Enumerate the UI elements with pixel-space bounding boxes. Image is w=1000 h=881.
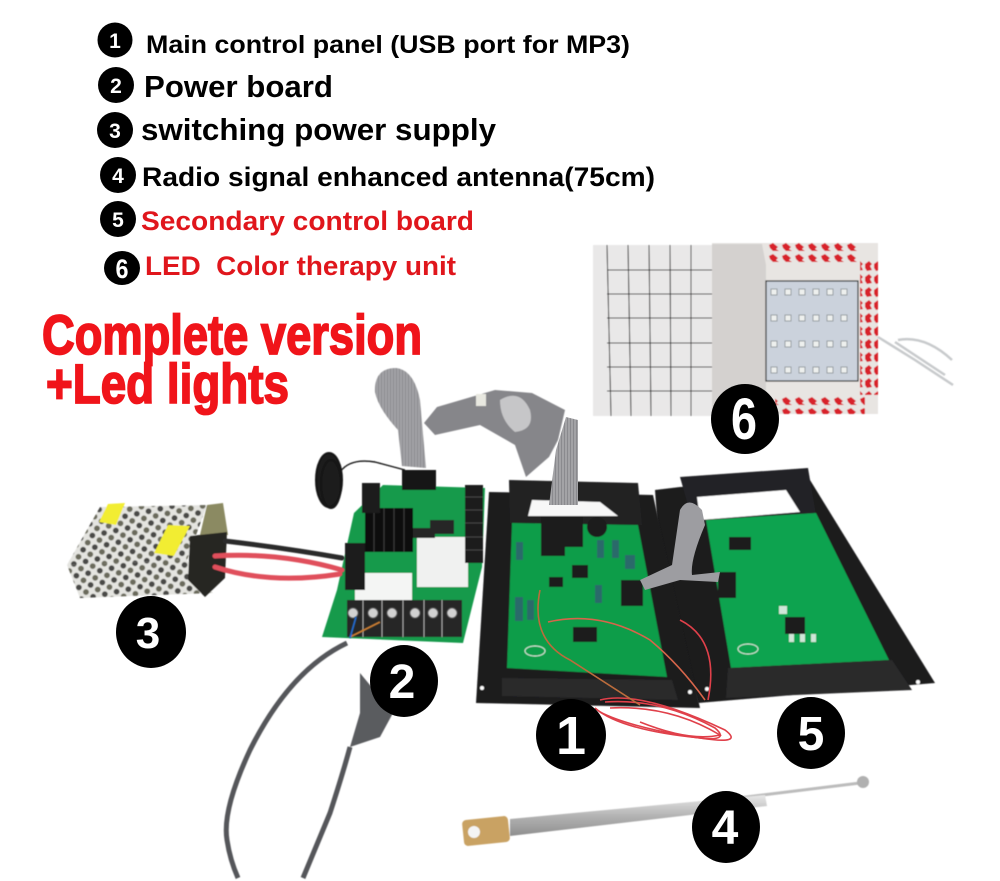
legend item 1 xyxy=(98,22,630,59)
rear wall xyxy=(509,480,642,525)
adhesive frame xyxy=(712,242,878,414)
legend item 5: 5 xyxy=(112,209,124,232)
power board xyxy=(316,453,485,643)
grid sheet xyxy=(593,245,723,416)
bottom terminal block xyxy=(347,600,462,637)
connector xyxy=(402,470,436,490)
number badges on the photo xyxy=(116,384,845,863)
mounting holes xyxy=(480,686,692,694)
top and front faces xyxy=(67,505,207,565)
badge 1 xyxy=(536,699,606,771)
relays xyxy=(355,520,468,611)
rear wall xyxy=(680,468,816,526)
legend item 2: 2 xyxy=(110,75,122,98)
wires to power board xyxy=(215,541,342,578)
LED panel xyxy=(766,281,858,381)
badge 1: 1 xyxy=(556,706,586,766)
pcb pads xyxy=(779,606,816,642)
left terminal row xyxy=(345,483,380,590)
switching power supply xyxy=(67,503,342,598)
heading: complete version xyxy=(42,303,422,415)
ribbon linking both boards xyxy=(640,502,720,590)
LED colour therapy unit photo xyxy=(593,242,953,416)
badge 6 xyxy=(711,384,779,454)
legend item 6: 6 xyxy=(116,254,128,284)
mounting holes xyxy=(705,680,920,691)
temperature sensor coil xyxy=(316,453,405,508)
badge 2: 2 xyxy=(389,656,415,709)
badge 6: 6 xyxy=(731,387,757,452)
badge 4: 4 xyxy=(712,802,739,855)
terminal block xyxy=(188,532,227,597)
folded grey ribbon bundle xyxy=(424,390,565,477)
heading: complete version: +Led lights xyxy=(46,352,289,415)
power cord and plug xyxy=(226,617,393,878)
side panel xyxy=(200,503,228,535)
flange xyxy=(655,480,935,703)
heading: complete version: Complete version xyxy=(42,303,422,366)
LED cable xyxy=(878,337,953,385)
legend item 1: Main control panel (USB port for MP3) xyxy=(146,31,630,59)
heat sink xyxy=(365,508,413,552)
main control panel xyxy=(476,480,700,708)
legend item 5: Secondary control board xyxy=(141,206,474,236)
antenna xyxy=(462,776,869,846)
badge 4 xyxy=(692,791,760,863)
peeled backing xyxy=(712,244,766,414)
legend item 4: 4 xyxy=(112,165,124,188)
legend item 3: switching power supply xyxy=(141,112,497,147)
components xyxy=(541,516,643,642)
legend item 6: LED Color therapy unit xyxy=(145,251,456,281)
right terminal row xyxy=(465,485,483,563)
legend item 4: Radio signal enhanced antenna(75cm) xyxy=(142,162,655,192)
badge 3: 3 xyxy=(136,609,160,658)
legend item 1: 1 xyxy=(109,30,121,53)
legend item 3: 3 xyxy=(109,120,121,143)
badge 3 xyxy=(116,596,186,668)
front wall xyxy=(726,660,912,698)
board chips xyxy=(718,537,805,634)
pcb xyxy=(507,523,667,677)
front wall xyxy=(502,678,678,700)
badge 5: 5 xyxy=(798,708,824,761)
ribbon cables xyxy=(375,368,565,477)
looped ribbon to power board xyxy=(375,368,426,468)
legend item 2: Power board xyxy=(144,69,333,104)
ribbon into main board xyxy=(549,417,578,505)
secondary control board xyxy=(655,468,935,703)
flange xyxy=(476,492,700,708)
legend list xyxy=(97,22,655,285)
badge 2 xyxy=(370,645,438,717)
badge 5 xyxy=(777,697,845,769)
pcb xyxy=(706,513,889,668)
red antenna wire coil xyxy=(538,590,731,740)
